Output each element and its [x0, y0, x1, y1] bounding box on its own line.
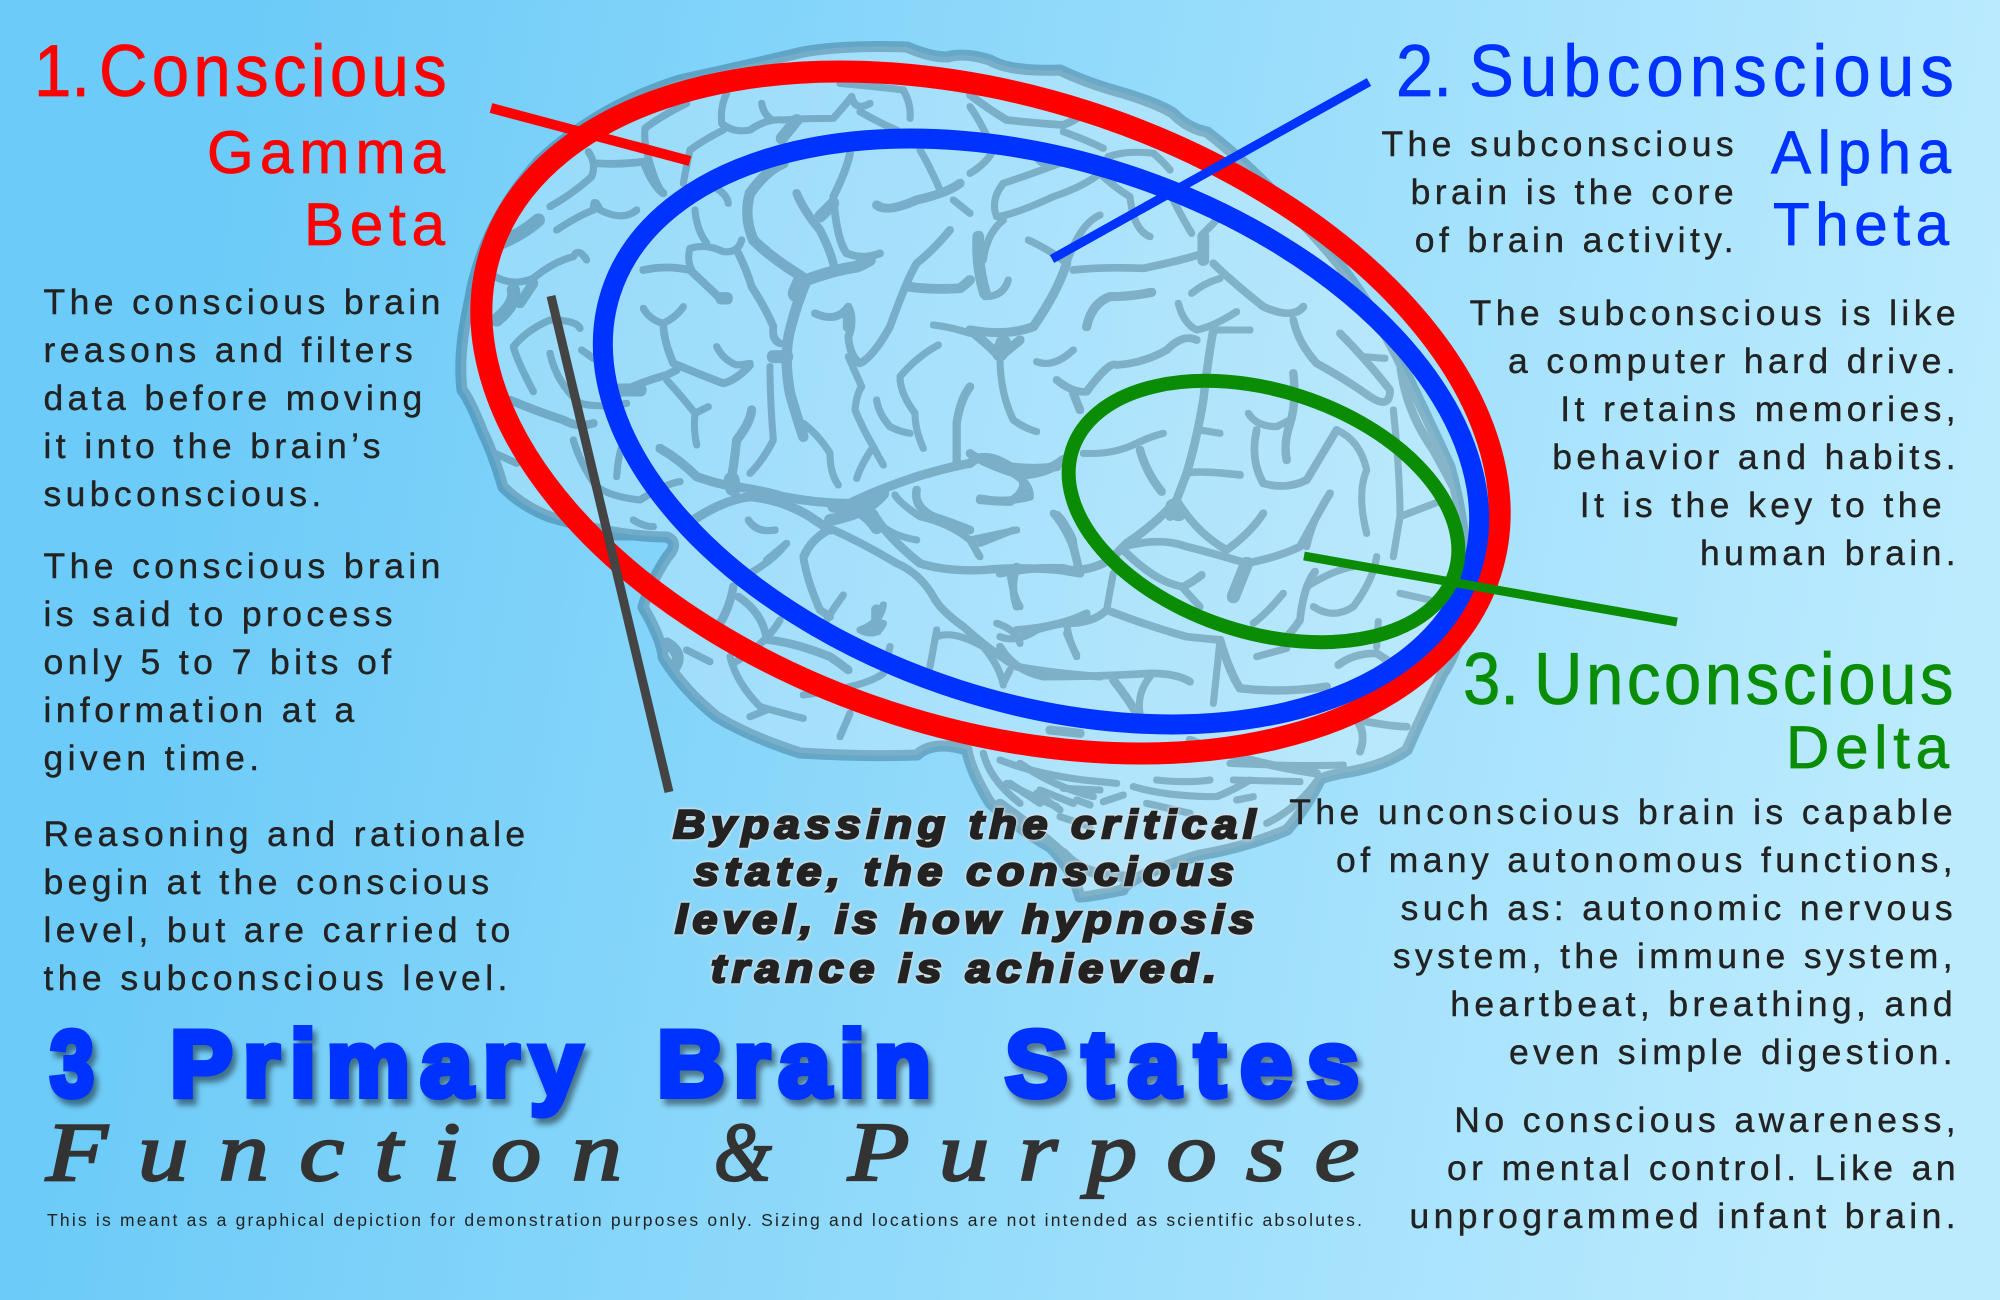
brain illustration: [461, 47, 1466, 897]
heading: conscious: 1.: [34, 30, 90, 112]
pointer: unconscious: [1304, 556, 1677, 622]
text block: conscious bits: information at a: [44, 690, 359, 730]
text block: conscious reasoning: begin at the conscious: [44, 862, 494, 902]
text block: conscious filter: it into the brain’s: [44, 426, 385, 466]
wave: beta: Beta: [304, 191, 446, 258]
text block: unconscious functions: of many autonomous functions,: [1336, 840, 1957, 880]
subtitle: [45, 1106, 1359, 1199]
text block: unconscious awareness: or mental control. Like an: [1447, 1148, 1960, 1188]
title: [50, 1011, 1359, 1117]
text block: unconscious functions: system, the immune system,: [1393, 936, 1957, 976]
subtitle: Function: [45, 1106, 622, 1199]
text block: conscious reasoning: Reasoning and rationale: [44, 814, 530, 854]
text block: unconscious awareness: No conscious awareness,: [1454, 1100, 1960, 1140]
text block: unconscious awareness: unprogrammed infant brain.: [1409, 1196, 1960, 1236]
text block: subconscious hard drive: [1470, 293, 1960, 573]
text block: unconscious functions: heartbeat, breathing, and: [1450, 984, 1957, 1024]
text block: conscious bits: given time.: [44, 738, 264, 778]
text block: conscious filter: [44, 282, 445, 514]
text block: subconscious hard drive: human brain.: [1700, 533, 1960, 573]
text block: conscious reasoning: [44, 814, 530, 998]
text block: subconscious core: [1381, 124, 1738, 260]
text block: subconscious hard drive: It is the key to the: [1580, 485, 1946, 525]
pointer: critical state: [551, 296, 669, 792]
text block: conscious bits: is said to process: [44, 594, 397, 634]
text block: conscious reasoning: the subconscious level.: [44, 958, 512, 998]
ring: conscious (red): [394, 0, 1587, 874]
brain silhouette fill: [461, 47, 1466, 897]
wave: alpha: Alpha: [1771, 119, 1952, 186]
text block: subconscious core: brain is the core: [1411, 172, 1738, 212]
heading: subconscious: Subconscious: [1469, 30, 1954, 112]
text block: subconscious hard drive: The subconscious is like: [1470, 293, 1960, 333]
text block: conscious bits: The conscious brain: [44, 546, 445, 586]
callout: hypnosis: level, is how hypnosis: [675, 897, 1254, 941]
text block: subconscious core: of brain activity.: [1415, 220, 1738, 260]
text block: unconscious functions: [1289, 792, 1957, 1072]
text block: unconscious functions: The unconscious brain is capable: [1289, 792, 1957, 832]
callout: hypnosis: trance is achieved.: [711, 946, 1216, 990]
panel: conscious: [34, 30, 530, 998]
brain outline and sulci: [461, 47, 1466, 897]
callout: hypnosis: state, the conscious: [694, 849, 1234, 893]
text block: unconscious functions: such as: autonomic nervous: [1401, 888, 1957, 928]
disclaimer: This is meant as a graphical depiction for demonstration purposes only. Sizing and locations are not intended as scientific absolutes.: [47, 1210, 1362, 1230]
heading: conscious: Conscious: [99, 30, 447, 112]
panel: unconscious: [1289, 638, 1960, 1236]
text block: conscious filter: data before moving: [44, 378, 427, 418]
text block: conscious filter: The conscious brain: [44, 282, 445, 322]
callout: hypnosis: [673, 802, 1257, 990]
text block: conscious filter: reasons and filters: [44, 330, 417, 370]
title: 3: [50, 1012, 94, 1117]
text block: conscious bits: [44, 546, 445, 778]
wave: theta: Theta: [1773, 191, 1950, 258]
heading: subconscious: 2.: [1396, 30, 1452, 112]
panel: subconscious: [1381, 30, 1960, 573]
wave: delta: Delta: [1786, 714, 1950, 781]
title: States: [1005, 1011, 1359, 1116]
text block: unconscious functions: even simple digestion.: [1509, 1032, 1957, 1072]
text block: conscious filter: subconscious.: [44, 474, 326, 514]
text block: conscious reasoning: level, but are carried to: [44, 910, 515, 950]
text block: unconscious awareness: [1409, 1100, 1960, 1236]
heading: unconscious: Unconscious: [1534, 638, 1954, 720]
wave: gamma: Gamma: [207, 119, 446, 186]
heading: unconscious: 3.: [1463, 638, 1519, 720]
text block: subconscious core: The subconscious: [1381, 124, 1738, 164]
text block: subconscious hard drive: a computer hard drive.: [1508, 341, 1960, 381]
ring: subconscious (blue): [528, 35, 1554, 828]
title: Primary: [170, 1011, 582, 1116]
text block: subconscious hard drive: It retains memories,: [1560, 389, 1960, 429]
subtitle: Purpose: [847, 1106, 1359, 1199]
pointer: subconscious: [1052, 82, 1369, 259]
ring: unconscious (green): [1035, 335, 1492, 688]
subtitle: &: [714, 1106, 772, 1199]
pointer: conscious: [491, 108, 690, 161]
callout: hypnosis: Bypassing the critical: [673, 802, 1257, 846]
text block: conscious bits: only 5 to 7 bits of: [44, 642, 395, 682]
text block: subconscious hard drive: behavior and habits.: [1552, 437, 1960, 477]
title: Brain: [657, 1011, 931, 1116]
